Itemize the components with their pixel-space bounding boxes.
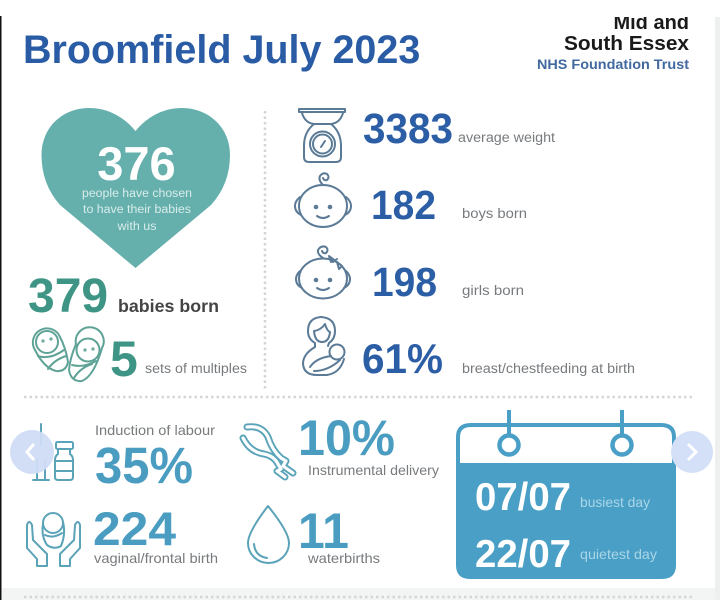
icon: hands holding baby: [27, 513, 80, 566]
stat: vaginal birth: 224: [93, 502, 176, 555]
stat: boys born: boys born: [462, 206, 527, 221]
title: Broomfield July 2023: [23, 28, 420, 72]
icon: forceps: [243, 427, 293, 477]
stat: sets of multiples: sets of multiples: [145, 361, 247, 376]
logo text: South Essex: [564, 33, 689, 55]
stat: vaginal birth: vaginal/frontal birth: [94, 550, 218, 566]
stat: average weight: average weight: [458, 130, 555, 145]
panel: calendar: [456, 410, 676, 579]
panel: heart: [42, 108, 230, 268]
logo text: [538, 17, 689, 69]
logo text: NHS Foundation Trust: [537, 56, 689, 72]
stat: boys born: [371, 182, 527, 228]
stat: babies born: [28, 270, 219, 323]
panel: heart: people have chosen: [82, 188, 192, 200]
icon: baby girl: [296, 246, 350, 298]
panel: heart: to have their babies: [83, 204, 191, 216]
panel: calendar: 07/07: [475, 476, 571, 519]
stat: babies born: babies born: [118, 296, 219, 316]
panel: calendar: quietest day: [580, 546, 657, 562]
icon: baby boy: [295, 173, 351, 227]
stat: breastfeeding: 61%: [362, 335, 443, 382]
carousel button: previous: [10, 430, 54, 474]
stat: instrumental delivery: [298, 410, 439, 478]
panel: calendar: busiest day: [580, 494, 650, 510]
panel: calendar: 22/07: [475, 533, 571, 576]
icon: water drop: [248, 506, 289, 563]
stat: instrumental delivery: 10%: [298, 410, 395, 466]
logo text: Mid and: [613, 12, 689, 34]
stat: breastfeeding: [362, 335, 635, 382]
stat: waterbirths: waterbirths: [307, 550, 380, 566]
icon: scales: [299, 109, 345, 162]
icon: induction syringe and vial: [33, 424, 73, 480]
stat: induction: Induction of labour: [95, 422, 215, 438]
stat: waterbirths: 11: [298, 503, 349, 559]
stat: breastfeeding: breast/chestfeeding at birth: [462, 361, 635, 376]
stat: instrumental delivery: Instrumental delivery: [308, 462, 439, 478]
stat: sets of multiples: 5: [110, 331, 138, 387]
carousel button: next: [671, 431, 713, 473]
stat: induction: 35%: [95, 437, 193, 494]
stat: induction: [95, 422, 215, 494]
icon: twin babies: [33, 327, 104, 381]
stat: average weight: 3383: [363, 105, 453, 153]
icon: breastfeeding: [303, 317, 344, 375]
stat: girls born: [372, 259, 524, 305]
panel: heart: with us: [116, 221, 157, 233]
panel: heart: 376: [97, 137, 176, 190]
stat: girls born: 198: [372, 259, 437, 305]
stat: average weight: [363, 105, 555, 153]
stat: girls born: girls born: [462, 283, 524, 298]
stat: waterbirths: [298, 503, 380, 566]
stat: boys born: 182: [371, 182, 436, 228]
stat: babies born: 379: [28, 270, 108, 323]
stat: vaginal birth: [93, 502, 218, 566]
stat: sets of multiples: [110, 331, 247, 387]
